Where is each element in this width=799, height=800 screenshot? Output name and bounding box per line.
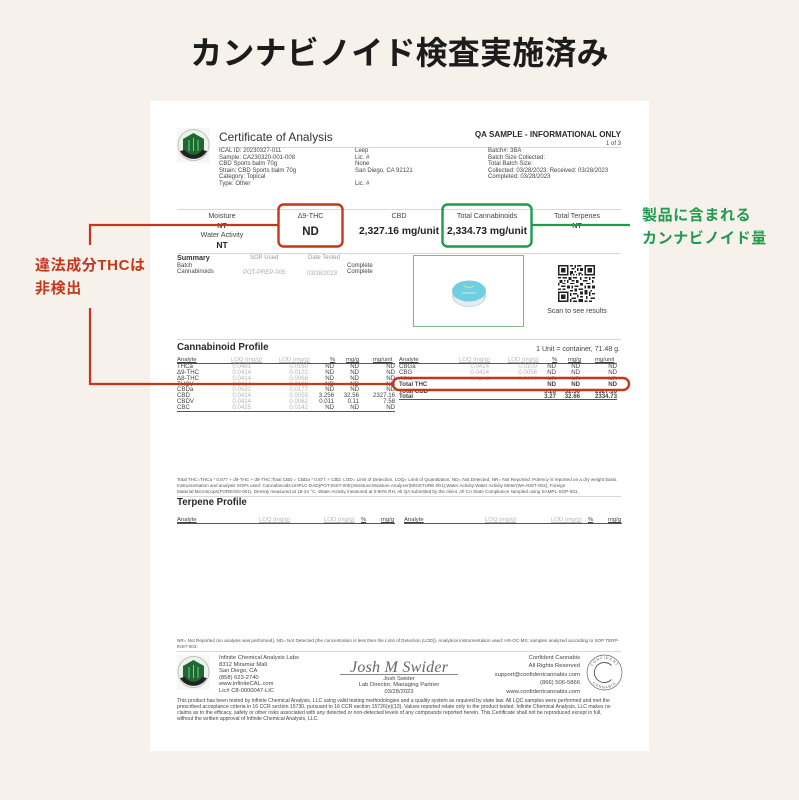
sample details: Type: Other: [219, 180, 250, 186]
client details: Lic. #: [355, 180, 369, 186]
table: cannabinoids right: 3.26: [544, 388, 556, 395]
table: terpene right: LOQ (mg/g): [485, 517, 516, 523]
metric: CBD: [359, 212, 439, 237]
table: terpene left: mg/g: [381, 517, 394, 523]
table: terpene left: %: [361, 517, 366, 523]
metric: total terpenes: [554, 212, 600, 230]
confident cannabis contact: All Rights Reserved: [529, 663, 580, 669]
sample details: CBD Sports balm 70g: [219, 161, 277, 167]
confident cannabis contact: (866) 506-5866: [540, 680, 580, 686]
sample details: ICAL ID: 20230327-011: [219, 148, 281, 154]
callout: illegal THC not detected: [35, 257, 146, 297]
table: cannabinoids right: 0.0127: [518, 376, 537, 383]
table: cannabinoids left: LOD (mg/g): [279, 357, 310, 363]
table: cannabinoids right: 2334.73: [595, 393, 617, 400]
table: cannabinoids left: 0.0066: [289, 375, 308, 382]
heading: terpene profile: Terpene Profile: [177, 497, 247, 508]
table: cannabinoids left: ND: [386, 363, 395, 370]
summary table: Complete: [347, 269, 373, 275]
table: cannabinoids right: ND: [547, 376, 556, 383]
table: cannabinoids left: 0.0160: [289, 363, 308, 370]
certificate heading: Certificate of Analysis: [219, 130, 333, 144]
client details: Lic. #: [355, 154, 369, 160]
table: cannabinoids left: CBDa: [177, 386, 193, 393]
table: cannabinoids left: CBD: [177, 392, 190, 399]
arrow: cannabinoid connector: [532, 224, 630, 226]
batch details: [488, 148, 608, 180]
table: cannabinoids right: ND: [608, 376, 617, 383]
metric: moisture: [200, 212, 244, 250]
table: cannabinoids right: 0.0056: [518, 369, 537, 376]
callout: cannabinoid amount: 製品に含まれる: [642, 207, 751, 224]
table: cannabinoids right: ND: [547, 381, 556, 388]
callout: illegal THC not detected: 非検出: [35, 280, 82, 297]
table: cannabinoids left: ND: [325, 386, 334, 393]
table: cannabinoids right: ND: [608, 369, 617, 376]
batch details: Completed: 03/28/2023: [488, 174, 550, 180]
table: cannabinoids left: ND: [350, 386, 359, 393]
table: cannabinoids left: 0.0138: [289, 381, 308, 388]
table: cannabinoids left: ND: [386, 386, 395, 393]
lab address: www.infiniteCAL.com: [219, 681, 273, 687]
table: cannabinoids left: 0.11: [348, 398, 359, 405]
table: terpene right: LOD (mg/g): [551, 517, 582, 523]
metric: delta-9 THC: Δ9-THC: [298, 212, 323, 220]
metric: CBD: 2,327.16 mg/unit: [359, 226, 439, 237]
client details: None: [355, 161, 369, 167]
table: cannabinoids right: LOD (mg/g): [508, 357, 539, 363]
highlight row: total THC: [393, 378, 629, 390]
table: cannabinoids left: ND: [350, 369, 359, 376]
highlight box: delta-9 THC: [278, 204, 342, 246]
metric: moisture: NT: [217, 222, 227, 230]
table: cannabinoids left: [177, 357, 395, 412]
QR caption: Scan to see results: [547, 308, 607, 315]
table: cannabinoids right: ND: [571, 376, 580, 383]
table: cannabinoids left: ND: [350, 404, 359, 411]
table: cannabinoids right: Total CBD: [399, 388, 428, 395]
metric: total terpenes: Total Terpenes: [554, 212, 600, 220]
table: cannabinoids left: 0.0414: [232, 392, 251, 399]
footnote: potency: Total THC=THCa * 0.877 + d9-THC + d8-THC;Total CBD = CBDa * 0.877 + CBD. LOD= Limit of Detection, LOQ= Limit of Quantitation, ND= Not Detected, NR= Not Reported. Potency is reported on a dry weight basis.: [177, 477, 617, 482]
table: cannabinoids left: mg/unit: [373, 357, 392, 363]
disclaimer: prescribed acceptance criteria in 16 CCR section 15730, pursuant to 16 CCR section 15726(e)(13). Values reported relate only to the product tested. Infinite Chemical Analysis, LLC makes no: [177, 704, 611, 710]
confident cannabis contact: support@confidentcannabis.com: [495, 672, 580, 678]
icon: lab logo bottom: [177, 655, 210, 690]
summary table: [177, 253, 373, 276]
panel: certificate of analysis: [150, 101, 649, 751]
footnote: potency: Instrumentation and analysis SOPs used: Cannabinoids:UHPLC-DAD(POT-INST-005);Moisture:Moisture Analyzer(MOISTURE-001);Water Activity:Water Activity Meter(WA-INST-002), Foreign: [177, 483, 565, 488]
table: terpene left: [177, 517, 394, 523]
table: cannabinoids left: 0.0414: [232, 381, 251, 388]
table: cannabinoids right: 0.0414: [470, 376, 489, 383]
disclaimer: claims as to the efficacy, safety or other risks associated with any detected or non-detected levels of any compounds reported herein. This Certificate shall not be reproduced except in full,: [177, 710, 602, 716]
metric: total cannabinoids: Total Cannabinoids: [457, 212, 517, 220]
batch details: Total Batch Size:: [488, 161, 533, 167]
table: cannabinoids left: ND: [350, 375, 359, 382]
confident cannabis contact: [495, 655, 580, 695]
footnote: terpene: INST-003.: [177, 644, 198, 649]
table: cannabinoids right: ND: [608, 363, 617, 370]
table: cannabinoids left: 0.0532: [232, 386, 251, 393]
metric: total terpenes: NT: [572, 222, 582, 230]
table: cannabinoids right: 2327.16: [595, 388, 617, 395]
table: cannabinoids right: 32.66: [565, 393, 580, 400]
lab address: Infinite Chemical Analysis Labs: [219, 655, 299, 661]
table: cannabinoids right: LOQ (mg/g): [459, 357, 490, 363]
table: cannabinoids right: Analyte: [399, 357, 419, 363]
table: cannabinoids left: 7.58: [383, 398, 395, 405]
heading: cannabinoid profile: Cannabinoid Profile: [177, 342, 268, 353]
table: cannabinoids right: mg/unit: [595, 357, 614, 363]
table: cannabinoids left: ND: [386, 381, 395, 388]
table: cannabinoids left: 0.011: [319, 398, 334, 405]
table: cannabinoids left: 0.0414: [232, 398, 251, 405]
metric: delta-9 THC: [298, 212, 323, 238]
disclaimer: This product has been tested by Infinite Chemical Analysis, LLC using valid testing methodologies and a quality system as required by state law. All LQC samples were performed and met the: [177, 698, 610, 704]
table: cannabinoids right: ND: [571, 381, 580, 388]
table: cannabinoids left: 2327.16: [373, 392, 395, 399]
table: terpene left: Analyte: [177, 517, 197, 523]
table: cannabinoids left: ND: [325, 369, 334, 376]
callout: illegal THC not detected: 違法成分THCは: [35, 257, 146, 274]
table: cannabinoids left: 0.0481: [232, 363, 251, 370]
summary table: Complete: [347, 263, 373, 269]
table: cannabinoids left: 0.0177: [289, 386, 308, 393]
table: cannabinoids left: ND: [350, 363, 359, 370]
table: cannabinoids right: ND: [547, 363, 556, 370]
table: cannabinoids left: 0.0414: [232, 369, 251, 376]
table: terpene left: LOQ (mg/g): [259, 517, 290, 523]
table: cannabinoids left: ND: [325, 404, 334, 411]
client details: San Diego, CA 92121: [355, 168, 413, 174]
table: cannabinoids left: 0.0122: [289, 369, 308, 376]
table: cannabinoids left: Analyte: [177, 357, 197, 363]
arrow: THC connector upper: [90, 225, 278, 245]
table: cannabinoids left: ND: [350, 381, 359, 388]
metric: moisture: Water Activity: [201, 230, 243, 238]
arrow: THC connector lower: [90, 308, 392, 384]
table: cannabinoids left: 0.0142: [289, 404, 308, 411]
table: cannabinoids left: ND: [325, 375, 334, 382]
table: cannabinoids left: 0.0425: [232, 404, 251, 411]
table: cannabinoids right: 0.0414: [470, 369, 489, 376]
metric: total cannabinoids: 2,334.73 mg/unit: [447, 226, 527, 237]
signature: Josh M Swider: [350, 659, 449, 676]
table: cannabinoids left: 0.0055: [289, 392, 308, 399]
icon: confident cannabis seal: [586, 654, 622, 690]
confident cannabis contact: Confident Cannabis: [529, 655, 580, 661]
table: cannabinoids right: [399, 357, 617, 400]
signatory: [359, 676, 440, 695]
table: cannabinoids right: CBGa: [399, 363, 416, 370]
table: cannabinoids left: %: [330, 357, 335, 363]
table: cannabinoids right: ND: [547, 369, 556, 376]
summary table: Batch: [177, 263, 192, 269]
sample details: Category: Topical: [219, 174, 265, 180]
table: terpene right: mg/g: [608, 517, 621, 523]
highlight box: total cannabinoids: [442, 204, 532, 246]
lab address: Lic# C8-0000047-LIC: [219, 688, 274, 694]
metric: delta-9 THC: ND: [302, 226, 319, 238]
table: cannabinoids left: LOQ (mg/g): [231, 357, 262, 363]
icon: confident cannabis seal: CANNABIS: [593, 682, 616, 688]
table: cannabinoids left: Δ9-THC: [177, 369, 199, 376]
table: cannabinoids right: Total: [399, 393, 413, 400]
table: cannabinoids right: mg/g: [568, 357, 581, 363]
table: cannabinoids left: ND: [386, 369, 395, 376]
callout: cannabinoid amount: カンナビノイド量: [642, 230, 767, 247]
icon: confident cannabis seal: CONFIDENT: [590, 656, 618, 666]
signatory: Lab Director, Managing Partner: [359, 682, 439, 688]
table: cannabinoids left: THCa: [177, 363, 193, 370]
table: cannabinoids right: CBN: [399, 376, 412, 383]
table: terpene left: LOD (mg/g): [324, 517, 355, 523]
table: cannabinoids left: THCV: [177, 381, 194, 388]
table: cannabinoids left: 3.256: [319, 392, 334, 399]
table: cannabinoids left: Δ8-THC: [177, 375, 199, 382]
table: cannabinoids right: ND: [571, 369, 580, 376]
table: cannabinoids left: ND: [325, 381, 334, 388]
table: cannabinoids left: 0.0414: [232, 375, 251, 382]
icon: lab logo top: [177, 128, 210, 163]
table: cannabinoids left: ND: [386, 404, 395, 411]
client details: Leep: [355, 148, 368, 154]
table: terpene right: Analyte: [404, 517, 424, 523]
table: cannabinoids right: ND: [571, 363, 580, 370]
page number: 1 of 3: [606, 141, 621, 147]
summary table: Date Tested: [308, 255, 340, 261]
batch details: Batch#: 3BA: [488, 148, 521, 154]
footnote: potency: Material:Microscope(FOREIGN-001). Density measured at 19-24 °C, Water Activity measured at 0-90% RH. All QA submitted by the client, All CA State Compliance sampled using SAMPL-SOP-001.: [177, 489, 579, 494]
table: cannabinoids right: 32.56: [565, 388, 580, 395]
table: terpene right: [404, 517, 622, 523]
unit note: 1 Unit = container, 71.48 g.: [536, 346, 620, 353]
table: cannabinoids right: CBG: [399, 369, 412, 376]
client details: [355, 148, 413, 186]
lab address: [219, 655, 299, 694]
metric: moisture: NT: [216, 240, 228, 250]
icon: QR code: [558, 265, 595, 302]
product photo frame: [413, 255, 524, 327]
table: cannabinoids right: 0.0100: [518, 363, 537, 370]
table: cannabinoids right: %: [552, 357, 557, 363]
table: cannabinoids right: Total THC: [399, 381, 427, 388]
summary table: Summary: [177, 253, 210, 262]
table: cannabinoids left: 0.0062: [289, 398, 308, 405]
table: cannabinoids left: ND: [386, 375, 395, 382]
disclaimer: [177, 698, 611, 722]
metric: CBD: CBD: [392, 212, 406, 220]
summary table: SOP Used: [250, 255, 278, 261]
lab address: (858) 623-2740: [219, 675, 259, 681]
table: cannabinoids left: CBDV: [177, 398, 194, 405]
lab address: 8312 Miramar Mall: [219, 662, 267, 668]
sample details: Strain: CBD Sports balm 70g: [219, 168, 296, 174]
summary table: 03/28/2023: [307, 270, 337, 276]
signatory: Josh Swider: [383, 676, 415, 682]
callout: cannabinoid amount: [642, 207, 767, 247]
table: cannabinoids left: mg/g: [346, 357, 359, 363]
footnote: potency: [177, 477, 618, 494]
sample status: QA SAMPLE - INFORMATIONAL ONLY: [475, 130, 621, 139]
signatory: 03/28/2023: [384, 689, 414, 695]
batch details: Batch Size Collected:: [488, 154, 545, 160]
metric: total cannabinoids: [447, 212, 527, 237]
table: cannabinoids right: 3.27: [544, 393, 556, 400]
table: cannabinoids right: ND: [608, 381, 617, 388]
lab address: San Diego, CA: [219, 668, 257, 674]
batch details: Collected: 03/28/2023; Received: 03/28/2023: [488, 168, 608, 174]
title: カンナビノイド検査実施済み: [190, 35, 609, 71]
table: terpene right: %: [588, 517, 593, 523]
summary table: Cannabinoids: [177, 269, 214, 275]
table: cannabinoids left: ND: [325, 363, 334, 370]
disclaimer: without the written approval of Infinite Chemical Analysis, LLC.: [177, 716, 319, 722]
sample details: [219, 148, 296, 186]
summary table: POT-PREP-005: [243, 270, 285, 276]
icon: product tin: [452, 280, 486, 307]
footnote: terpene: NR= Not Reported (no analysis was performed), ND= Not Detected (the concentration is less then the Limit of Detection (LOD)). Analytical instrumentation used: HS-GC-MS; samples analyzed according to SOP TERP-: [177, 638, 619, 643]
confident cannabis contact: www.confidentcannabis.com: [506, 689, 580, 695]
footnote: terpene: [177, 638, 619, 649]
metric: moisture: Moisture: [208, 212, 236, 220]
sample details: Sample: CA230320-001-008: [219, 154, 295, 160]
table: cannabinoids right: 0.0414: [470, 363, 489, 370]
table: cannabinoids left: CBC: [177, 404, 190, 411]
table: cannabinoids left: 32.56: [344, 392, 359, 399]
